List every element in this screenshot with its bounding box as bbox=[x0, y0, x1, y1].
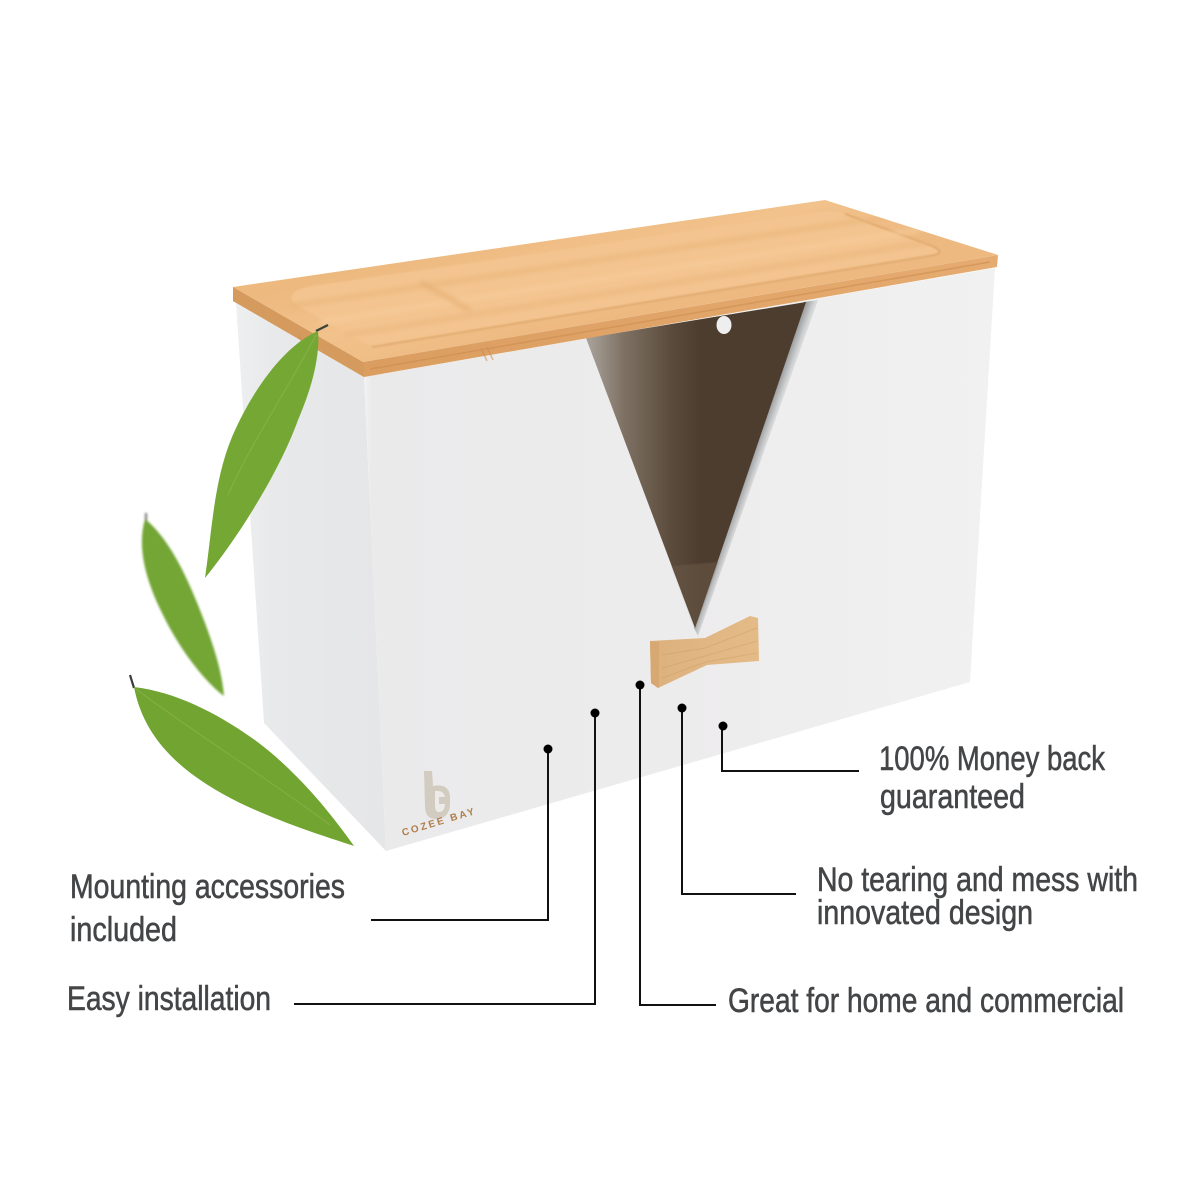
leaf: bottom bbox=[130, 675, 354, 846]
box left side face bbox=[236, 303, 386, 851]
brand logo: Cozee Bay: COZEE BAY bbox=[401, 807, 476, 839]
wooden bow-tie handle bbox=[650, 616, 759, 688]
leader line bbox=[294, 713, 595, 1004]
callout: no tearing bbox=[678, 704, 1138, 932]
box front face bbox=[364, 268, 995, 851]
callout: no tearing: innovated design bbox=[817, 894, 1033, 932]
dispenser slot opening bbox=[586, 300, 818, 636]
mounting hole bbox=[716, 316, 732, 334]
leaf: top bbox=[205, 325, 328, 578]
leaf: middle (blurred) bbox=[142, 513, 224, 696]
leader line bbox=[722, 726, 859, 771]
callout: mounting accessories: included bbox=[70, 911, 177, 949]
leader line bbox=[371, 749, 548, 920]
product: bamboo-lid paper towel dispenser bbox=[233, 200, 998, 851]
callout: no tearing: No tearing and mess with bbox=[817, 861, 1138, 899]
bamboo lid bbox=[233, 200, 998, 377]
leader line bbox=[682, 708, 796, 894]
callout: mounting accessories bbox=[70, 744, 552, 949]
callout: home and commercial bbox=[636, 680, 1124, 1020]
brand logo: Cozee Bay bbox=[401, 771, 476, 839]
callout: easy installation bbox=[67, 708, 600, 1018]
callout: mounting accessories: Mounting accessories bbox=[70, 868, 345, 906]
callout: money back: 100% Money back bbox=[879, 740, 1106, 778]
callout: money back: guaranteed bbox=[880, 778, 1025, 816]
leader line bbox=[640, 685, 716, 1005]
callout: money back bbox=[718, 722, 1106, 816]
callout: easy installation: Easy installation bbox=[67, 980, 271, 1018]
callout: home and commercial: Great for home and commercial bbox=[728, 982, 1124, 1020]
